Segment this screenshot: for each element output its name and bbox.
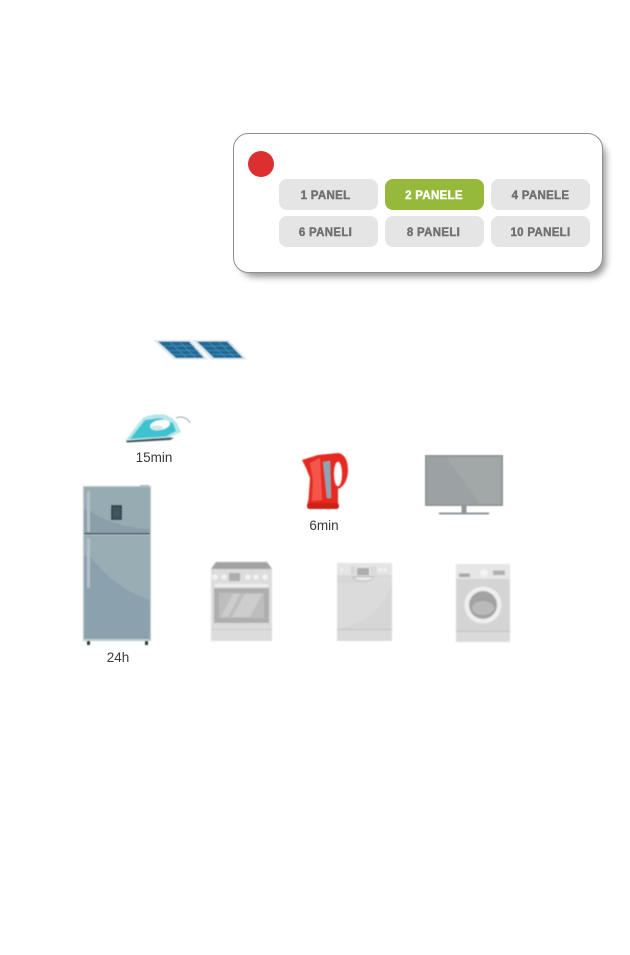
button: 2 panele selected — [385, 179, 484, 210]
icon: steam iron — [126, 414, 190, 442]
icon: washing machine — [456, 564, 510, 642]
button: 4 panele: 4 PANELE — [512, 190, 569, 202]
button: 8 paneli: 8 PANELI — [407, 227, 460, 239]
button: 4 panele — [491, 179, 590, 210]
label: kettle time: 6min — [309, 518, 339, 533]
icon: refrigerator — [84, 485, 150, 645]
label: refrigerator time: 24h — [107, 650, 129, 665]
panel: panel count selector — [234, 134, 606, 277]
button: 6 paneli — [279, 216, 378, 247]
icon: cooker — [211, 562, 272, 641]
icon: two solar panels — [153, 340, 247, 360]
button: 8 paneli — [385, 216, 484, 247]
icon: television — [425, 455, 503, 514]
icon: dishwasher — [337, 563, 392, 641]
button: 6 paneli: 6 PANELI — [299, 227, 352, 239]
button: 10 paneli — [491, 216, 590, 247]
button: 1 panel — [279, 179, 378, 210]
button: 2 panele selected: 2 PANELE — [405, 190, 463, 202]
button: 10 paneli: 10 PANELI — [510, 227, 571, 239]
label: iron time: 15min — [136, 450, 172, 465]
button: 1 panel: 1 PANEL — [301, 190, 350, 202]
icon: electric kettle — [302, 453, 348, 509]
icon: red status dot — [248, 151, 274, 177]
